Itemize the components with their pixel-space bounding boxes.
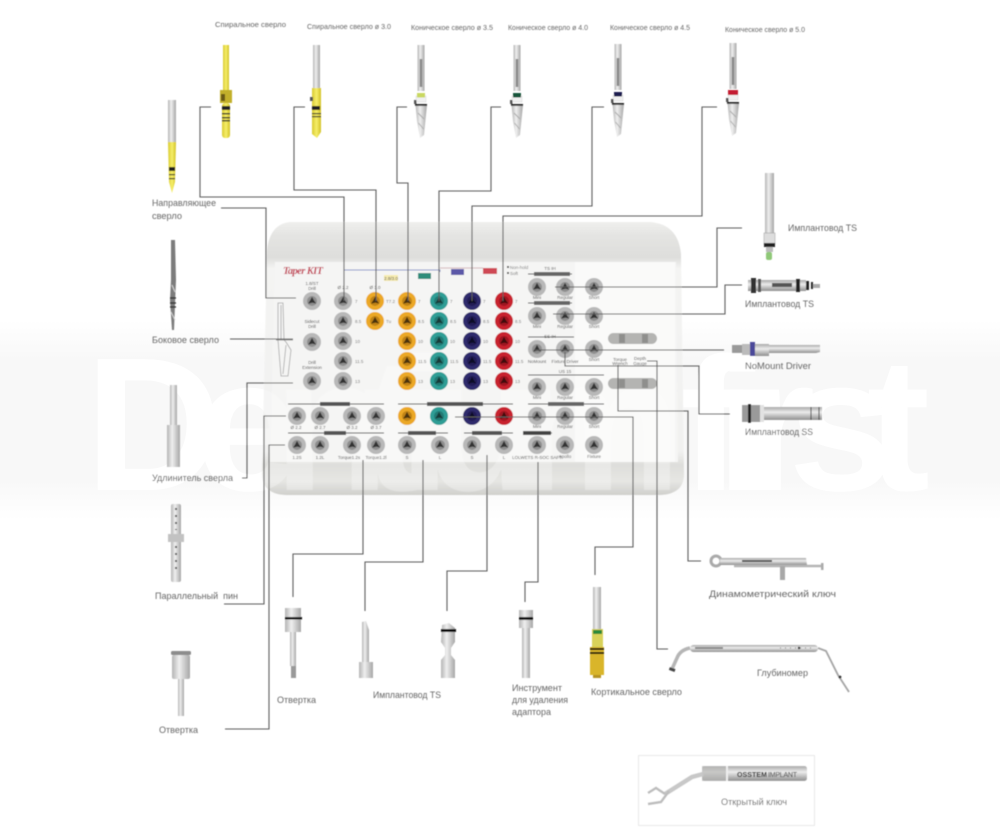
orange holes: 8.5: [418, 319, 425, 324]
torque and depth captions: Depth: [634, 356, 646, 361]
tray watermark overlay: Dentium first: [85, 319, 930, 531]
torque and depth captions: Wrench: [612, 361, 628, 366]
right column holes: Short: [589, 357, 600, 362]
orange holes: 10: [418, 339, 424, 344]
tool: implant driver head: [441, 623, 456, 678]
bottom labels: адаптора: [512, 707, 551, 717]
colour tags: Soft: [510, 271, 519, 276]
right column holes: Short: [589, 395, 600, 400]
lower left holes: Ø 3.2: [346, 425, 358, 430]
right column holes: Regular: [557, 295, 573, 300]
left labels: [152, 198, 238, 735]
orange holes: 11.5: [418, 359, 427, 364]
right column holes: Mini: [533, 424, 541, 429]
left column holes: 10: [355, 339, 361, 344]
torque and depth captions: Torque: [613, 357, 627, 362]
left column holes: 13: [355, 379, 361, 384]
left column holes: Ø 2.2: [337, 285, 349, 290]
left column holes: 11.5: [355, 359, 364, 364]
left column holes: Drill: [308, 324, 316, 329]
top labels: Коническое сверло ø 4.5: [610, 23, 690, 32]
top labels: Спиральное сверло: [215, 20, 286, 29]
left column holes: 8.5: [355, 319, 362, 324]
top labels: Коническое сверло ø 3.5: [411, 23, 493, 32]
colour tags: Non-hold: [510, 265, 529, 270]
bottom labels: для удаления: [512, 695, 568, 705]
panel: instrument tray: [85, 222, 930, 531]
right column holes: Short: [589, 324, 600, 329]
right column holes: Mini: [533, 395, 541, 400]
lower left holes: S: [470, 455, 474, 460]
tool: drill extension: [167, 385, 180, 467]
tool: adaptor removal instrument: [519, 610, 533, 678]
colour tags: [344, 265, 529, 281]
tool: twist drill yellow: [220, 45, 232, 138]
colour tags: 2.8/3.0: [384, 276, 398, 281]
Ø 3.0 holes: T7.2: [386, 299, 396, 304]
tool: taper drill 5.0: [726, 43, 739, 136]
lower left holes: 1.2S: [292, 455, 302, 460]
top labels: [215, 20, 805, 34]
bottom labels: Отвертка: [277, 695, 316, 705]
right labels: Имплантовод TS: [788, 223, 857, 233]
teal holes: 10: [450, 339, 456, 344]
torque and depth captions: Gauge: [633, 361, 647, 366]
Ø 3.0 holes: Tu: [386, 319, 392, 324]
right column holes: NoMount: [528, 359, 547, 364]
tool: NoMount driver: [732, 342, 820, 356]
right column holes: Mini: [533, 324, 541, 329]
red holes: [495, 292, 524, 425]
tool: taper drill 4.0: [510, 45, 523, 138]
lower left holes: Ø 3.7: [370, 425, 382, 430]
right column holes: Apollo: [559, 454, 572, 459]
leader lines: [200, 107, 742, 729]
Ø 3.0 holes: Ø 3.0: [369, 285, 381, 290]
right column holes: [528, 266, 603, 459]
left column holes: Extension: [302, 365, 322, 370]
drill diagram: [276, 303, 293, 376]
left column holes: [302, 281, 364, 390]
right column holes: Regular: [557, 395, 573, 400]
right column holes: SS IH: [544, 334, 556, 339]
navy holes: 11.5: [483, 359, 492, 364]
right labels: NoMount Driver: [745, 361, 811, 371]
tool: screwdriver center: [285, 608, 302, 678]
top labels: Коническое сверло ø 4.0: [508, 23, 588, 32]
navy holes: 7: [483, 299, 486, 304]
right column holes: Regular: [557, 324, 573, 329]
tool: side drill: [170, 240, 176, 330]
bottom labels: Имплантовод TS: [373, 690, 441, 700]
tray title: Taper KIT: [283, 266, 324, 277]
left labels: Направляющее: [152, 198, 216, 208]
navy holes: 8.5: [483, 319, 490, 324]
right labels: Имплантовод TS: [745, 299, 814, 309]
lower left holes: Torque1.2s: [338, 455, 361, 460]
left labels: Параллельный пин: [155, 591, 238, 601]
lower left holes: LOLWETS R-SOC SAFT: [512, 455, 562, 460]
lower left holes: S: [405, 455, 409, 460]
tool: torque wrench: [711, 556, 824, 580]
background watermark: Dentium first: [85, 319, 930, 531]
tool: implant driver TS horizontal: [748, 278, 820, 293]
right labels: Имплантовод SS: [745, 427, 813, 437]
bottom labels: Кортикальное сверло: [591, 687, 682, 697]
top labels: Спиральное сверло ø 3.0: [307, 22, 391, 31]
left column holes: Drill: [308, 360, 316, 365]
right column holes: Fixture: [587, 454, 601, 459]
lower left holes: 1.2L: [316, 455, 325, 460]
tool: taper drill 3.5: [414, 45, 427, 138]
tool: guide drill: [168, 100, 176, 193]
red holes: 8.5: [515, 319, 522, 324]
navy holes: 13: [483, 379, 489, 384]
right column holes: Mini: [533, 295, 541, 300]
red holes: 10: [515, 339, 521, 344]
tool: screwdriver left: [171, 651, 191, 716]
icon: open wrench: IMPLANT: [768, 772, 798, 779]
tool: depth gauge: [669, 645, 849, 692]
teal holes: 11.5: [450, 359, 459, 364]
left labels: Боковое сверло: [152, 335, 219, 345]
lower left holes: L: [439, 455, 442, 460]
teal holes: 8.5: [450, 319, 457, 324]
lower left holes: Ø 2.2: [290, 425, 302, 430]
left column holes: 7: [355, 299, 358, 304]
right labels: Глубиномер: [757, 668, 808, 678]
top labels: Коническое сверло ø 5.0: [725, 25, 805, 34]
red holes: 13: [515, 379, 521, 384]
icon: open wrench: [648, 766, 807, 804]
teal holes: 7: [450, 299, 453, 304]
right column holes: Regular: [557, 424, 573, 429]
bottom labels: Инструмент: [512, 683, 562, 693]
right column holes: US 15: [559, 369, 572, 374]
orange holes: [398, 292, 427, 425]
navy holes: 10: [483, 339, 489, 344]
left labels: Удлинитель сверла: [152, 473, 233, 483]
pill insets: [608, 333, 657, 389]
bottom labels: [277, 683, 682, 717]
right column holes: TS IH: [544, 266, 556, 271]
lower left holes: [288, 407, 562, 460]
teal holes: [430, 292, 459, 425]
right labels: [709, 223, 857, 678]
orange holes: 13: [418, 379, 424, 384]
tool: twist drill 3.0: [310, 45, 321, 138]
icon: open wrench: OSSTEM: [737, 772, 767, 779]
Ø 3.0 holes: [366, 285, 396, 330]
left labels: Отвертка: [159, 725, 198, 735]
left column holes: Drill: [308, 286, 316, 291]
tool: implant driver TS vertical: [764, 173, 775, 260]
tool: taper drill 4.5: [611, 44, 624, 137]
torque and depth captions: [612, 356, 647, 366]
tool: parallel pin: [168, 504, 184, 582]
right column holes: Fixture Driver: [551, 359, 579, 364]
orange holes: 7: [418, 299, 421, 304]
right labels: Динамометрический ключ: [709, 589, 836, 599]
right column holes: Short: [589, 424, 600, 429]
left column holes: Sidecut: [304, 319, 320, 324]
tool: cortical drill: [590, 587, 604, 678]
teal holes: 13: [450, 379, 456, 384]
panel: open wrench box: [638, 756, 814, 826]
lower left holes: Ø 2.7: [314, 425, 326, 430]
lower left holes: L: [503, 455, 506, 460]
tool: implant driver short: [359, 621, 373, 678]
right column holes: Short: [589, 295, 600, 300]
tool: implant driver SS: [742, 404, 822, 423]
left labels: сверло: [152, 211, 182, 221]
red holes: 7: [515, 299, 518, 304]
tray section bars: [288, 272, 604, 435]
left column holes: 1.8/ST: [305, 281, 319, 286]
label: open wrench: Открытый ключ: [721, 797, 787, 807]
lower left holes: Torque1.2l: [365, 455, 387, 460]
navy holes: [463, 292, 492, 425]
red holes: 11.5: [515, 359, 524, 364]
